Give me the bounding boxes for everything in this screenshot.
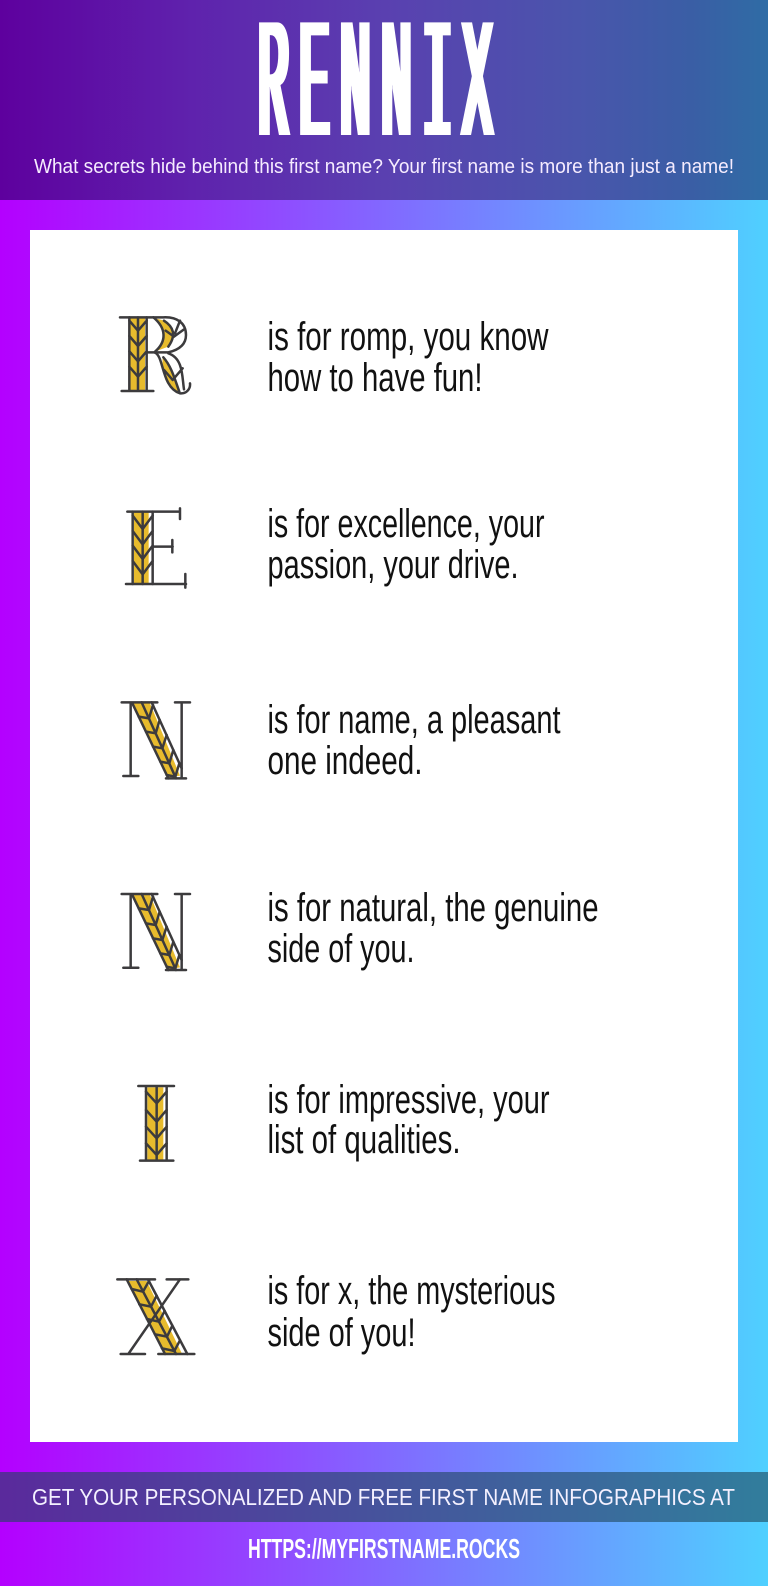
text: E line: passion, your drive. xyxy=(268,543,518,587)
text: N second line: is for natural, the genuine xyxy=(268,886,598,930)
text: X line xyxy=(268,1269,556,1355)
subtitle: What secrets hide behind this first name? Your first name is more than just a name! xyxy=(34,155,734,178)
row N xyxy=(122,698,561,783)
icon: letter X xyxy=(117,1279,194,1354)
text: N second line: side of you. xyxy=(268,927,414,971)
row I xyxy=(138,1078,550,1162)
row R xyxy=(120,315,549,400)
text: I line: is for impressive, your xyxy=(268,1078,550,1122)
icon: letter N second xyxy=(122,894,190,970)
text: X line: is for x, the mysterious xyxy=(268,1269,556,1313)
text: N line: is for name, a pleasant xyxy=(268,698,560,742)
text: I line xyxy=(268,1078,550,1162)
text: R line: is for romp, you know xyxy=(268,315,549,359)
text: N second line xyxy=(268,886,598,971)
icon: letter I xyxy=(138,1086,174,1161)
text: R line xyxy=(268,315,549,400)
row X xyxy=(117,1269,555,1355)
icon: letter N xyxy=(122,702,190,778)
icon: letter R xyxy=(120,317,190,393)
text: E line: is for excellence, your xyxy=(268,502,544,546)
footer url: HTTPS://MYFIRSTNAME.ROCKS xyxy=(248,1533,520,1564)
panel: white card xyxy=(30,230,738,1442)
header band xyxy=(0,0,768,200)
icon: letter E xyxy=(126,508,186,588)
text: N line xyxy=(268,698,560,783)
text: E line xyxy=(268,502,544,587)
footer band xyxy=(0,1472,768,1522)
row N second xyxy=(122,886,599,971)
text: N line: one indeed. xyxy=(268,739,422,783)
text: X line: side of you! xyxy=(268,1311,416,1355)
text: R line: how to have fun! xyxy=(268,356,482,400)
text: I line: list of qualities. xyxy=(268,1118,460,1162)
row E xyxy=(126,502,544,588)
